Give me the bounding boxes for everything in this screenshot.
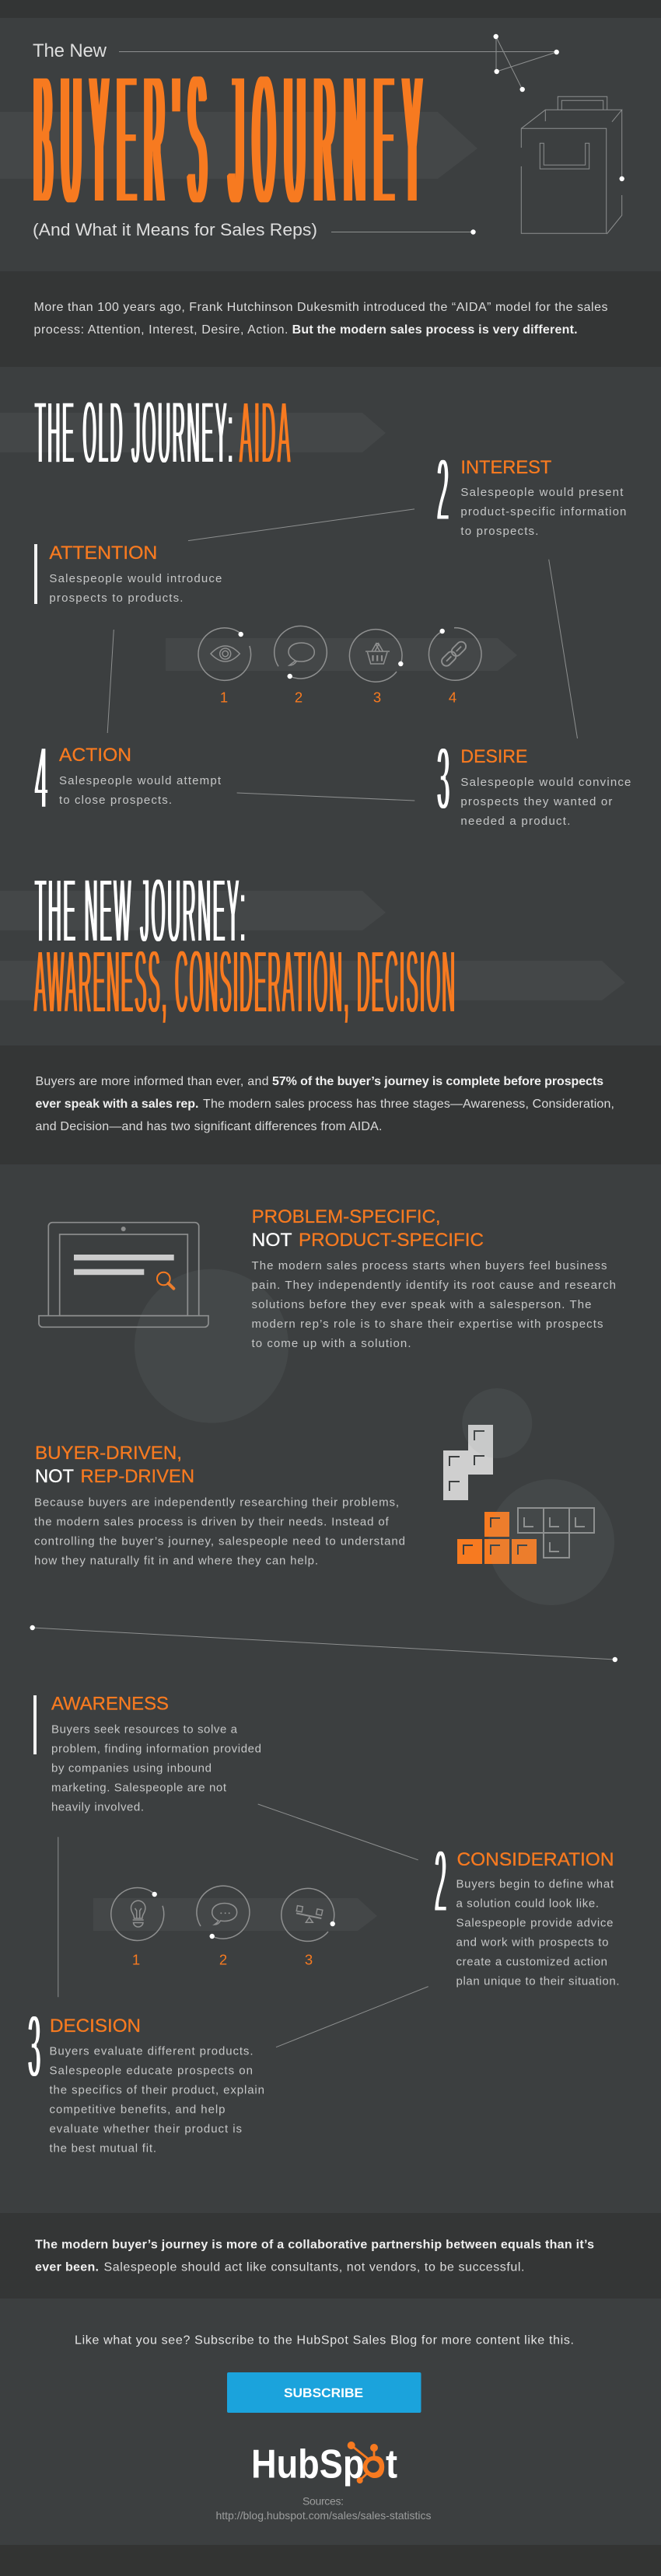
text block: buyer-driven — [34, 1443, 405, 1567]
stage: decision: 3 — [28, 1998, 40, 2096]
step: action: to close prospects. — [59, 794, 172, 807]
text block: buyer-driven: NOT — [35, 1466, 74, 1487]
step: action: 4 — [35, 729, 47, 828]
text block: problem-specific: to come up with a solution. — [252, 1337, 411, 1350]
icon row arrow — [93, 1898, 377, 1931]
text block: buyer-driven: the modern sales process is driven by their needs. Instead of — [34, 1516, 390, 1528]
icon: seesaw — [282, 1888, 335, 1941]
button: subscribe — [227, 2372, 421, 2413]
connector lines — [58, 1804, 428, 2047]
text block: intro: process: Attention, Interest, Desire, Action. — [34, 323, 288, 337]
background circle — [135, 1269, 289, 1423]
text block: buyer-driven: how they naturally fit in and where they can help. — [34, 1555, 318, 1567]
icon: eye — [198, 628, 251, 680]
step: interest: product-specific information — [460, 505, 626, 518]
text block: new journey intro — [36, 1075, 614, 1133]
text block: new journey intro: Buyers are more informed than ever, and — [36, 1075, 269, 1088]
text block: sources: Sources: — [303, 2495, 344, 2508]
outlined blocks — [518, 1508, 594, 1558]
text block: new journey intro: The modern sales process has three stages—Awareness, Consideration, — [203, 1098, 614, 1111]
icon: basket — [349, 630, 403, 682]
text block: sources — [216, 2495, 431, 2522]
step numbers: 4 — [449, 689, 456, 705]
panel: old journey — [0, 383, 631, 829]
background circles — [462, 1388, 614, 1605]
panel: old journey: AIDA — [240, 383, 292, 483]
step: attention: ATTENTION — [49, 543, 157, 564]
heading arrow — [0, 413, 386, 452]
stage: consideration: Buyers begin to define what — [456, 1878, 614, 1891]
text block: conclusion: Salespeople should act like consultants, not vendors, to be successful. — [104, 2261, 524, 2274]
step numbers — [220, 689, 456, 705]
text block: new journey intro: and Decision—and has two significant differences from AIDA. — [36, 1120, 383, 1133]
icon: shopping bag — [521, 96, 624, 234]
stage: awareness: by companies using inbound — [51, 1761, 212, 1775]
stage: consideration: plan unique to their situation. — [456, 1975, 619, 1988]
step: interest — [437, 442, 626, 539]
step: interest: 2 — [437, 442, 449, 539]
text block: buyer-driven: BUYER-DRIVEN, — [35, 1443, 182, 1464]
step numbers: 3 — [373, 689, 381, 705]
text block: intro — [34, 301, 608, 337]
step: action: ACTION — [59, 745, 131, 766]
connector lines — [107, 509, 577, 801]
step numbers: 1 — [220, 689, 228, 705]
text block: problem-specific: PROBLEM-SPECIFIC, — [252, 1206, 441, 1227]
stage: awareness: marketing. Salespeople are not — [51, 1781, 227, 1794]
step: desire — [437, 730, 631, 829]
icon: magnifier — [157, 1272, 173, 1289]
icon: light bulb — [111, 1887, 164, 1940]
step: attention — [34, 543, 222, 605]
text block: problem-specific: PRODUCT-SPECIFIC — [299, 1230, 484, 1251]
text block: conclusion: The modern buyer’s journey is more of a collaborative partnership between equals than it’s — [35, 2239, 594, 2252]
stage: consideration: a solution could look like. — [456, 1897, 599, 1911]
subtitle line with dot — [331, 229, 476, 235]
text block: intro: More than 100 years ago, Frank Hutchinson Dukesmith introduced the “AIDA” model for the sales — [34, 301, 608, 314]
text block: intro: But the modern sales process is very different. — [292, 323, 578, 337]
text block: problem-specific: The modern sales process starts when buyers feel business — [252, 1259, 607, 1272]
constellation lines and dots — [119, 34, 559, 92]
step numbers: 3 — [305, 1951, 313, 1967]
step: desire: needed a product. — [460, 815, 570, 828]
text block: buyer-driven: REP-DRIVEN — [81, 1466, 194, 1487]
icon: chat bubble — [197, 1886, 250, 1939]
icon: laptop — [39, 1223, 208, 1327]
step numbers: 2 — [295, 689, 303, 705]
stage: awareness: problem, finding information provided — [51, 1742, 261, 1755]
heading arrows — [0, 891, 625, 1000]
text block: buyer-driven: Because buyers are independently researching their problems, — [34, 1496, 399, 1510]
orange blocks — [457, 1512, 537, 1564]
stage: consideration: CONSIDERATION — [457, 1849, 614, 1870]
text block: conclusion — [35, 2239, 594, 2274]
heading: The Old Journey: AIDA — [35, 383, 292, 483]
stage: decision: Salespeople educate prospects on — [50, 2064, 253, 2077]
icon: speech bubble — [275, 626, 327, 679]
text block: problem-specific: pain. They independently identify its root cause and research — [252, 1279, 616, 1292]
step: interest: to prospects. — [460, 525, 538, 538]
stage: consideration — [435, 1833, 619, 1988]
panel: header — [0, 34, 624, 245]
text block: new journey intro: ever speak with a sales rep. — [36, 1098, 199, 1111]
grey blocks — [443, 1425, 493, 1500]
heading: The New: The New — [33, 40, 107, 61]
stage: decision — [28, 1998, 264, 2155]
step: interest: Salespeople would present — [460, 486, 624, 499]
step: desire: prospects they wanted or — [460, 795, 612, 808]
stage: consideration: and work with prospects to — [456, 1936, 608, 1949]
stage: awareness — [33, 1693, 261, 1813]
text block: problem-specific: NOT — [252, 1230, 292, 1251]
step numbers — [132, 1951, 313, 1967]
step: desire: Salespeople would convince — [460, 776, 631, 789]
divider line with dots — [30, 1625, 617, 1662]
stage: consideration: Salespeople provide advice — [456, 1917, 613, 1930]
text block: problem-specific: modern rep’s role is to share their expertise with prospects — [252, 1318, 603, 1331]
stage: awareness: Buyers seek resources to solve a — [51, 1723, 238, 1736]
stage: awareness: heavily involved. — [51, 1800, 144, 1813]
panel: new journey heading — [0, 860, 625, 1032]
step numbers: 2 — [219, 1951, 227, 1967]
header arrow — [0, 112, 477, 179]
step: attention: prospects to products. — [49, 592, 183, 605]
stage: awareness: AWARENESS — [51, 1693, 169, 1715]
title: Buyer's Journey — [34, 34, 432, 245]
stage: decision: Buyers evaluate different products. — [50, 2044, 254, 2058]
icon: chain link — [428, 628, 481, 680]
text block: new journey intro: 57% of the buyer’s journey is complete before prospects — [272, 1075, 603, 1088]
stage: decision: DECISION — [50, 2016, 141, 2037]
text block: problem-specific: solutions before they ever speak with a salesperson. The — [252, 1298, 591, 1311]
icon row arrow — [166, 638, 517, 671]
text block: sources: http://blog.hubspot.com/sales/sales-statistics — [216, 2509, 431, 2522]
text block: buyer-driven: controlling the buyer’s journey, salespeople need to understand — [34, 1534, 405, 1548]
step numbers: 1 — [132, 1951, 140, 1967]
stage: decision: competitive benefits, and help — [50, 2103, 226, 2116]
step: action: Salespeople would attempt — [59, 774, 222, 787]
subtitle: (And What it Means for Sales Reps) — [33, 220, 317, 239]
step: attention: Salespeople would introduce — [49, 572, 222, 585]
step: interest: INTEREST — [460, 457, 551, 478]
stage: decision: the best mutual fit. — [50, 2141, 156, 2155]
stage: decision: evaluate whether their product is — [50, 2122, 242, 2135]
logo: HubSpot: HubSpot — [251, 2442, 397, 2487]
step: desire: 3 — [437, 730, 449, 829]
step: action — [35, 729, 222, 828]
icon: puzzle blocks — [443, 1425, 594, 1564]
text block: conclusion: ever been. — [35, 2261, 99, 2274]
stage: decision: the specifics of their product, explain — [50, 2083, 264, 2096]
text block: subscribe prompt: Like what you see? Subscribe to the HubSpot Sales Blog for more content like this. — [75, 2334, 574, 2347]
button: subscribe: SUBSCRIBE — [284, 2386, 363, 2400]
panel: new journey stages — [28, 1693, 619, 2155]
step: desire: DESIRE — [460, 746, 527, 767]
stage: consideration: 2 — [435, 1833, 446, 1931]
stage: consideration: create a customized action — [456, 1956, 607, 1969]
text block: problem-specific — [252, 1206, 616, 1350]
